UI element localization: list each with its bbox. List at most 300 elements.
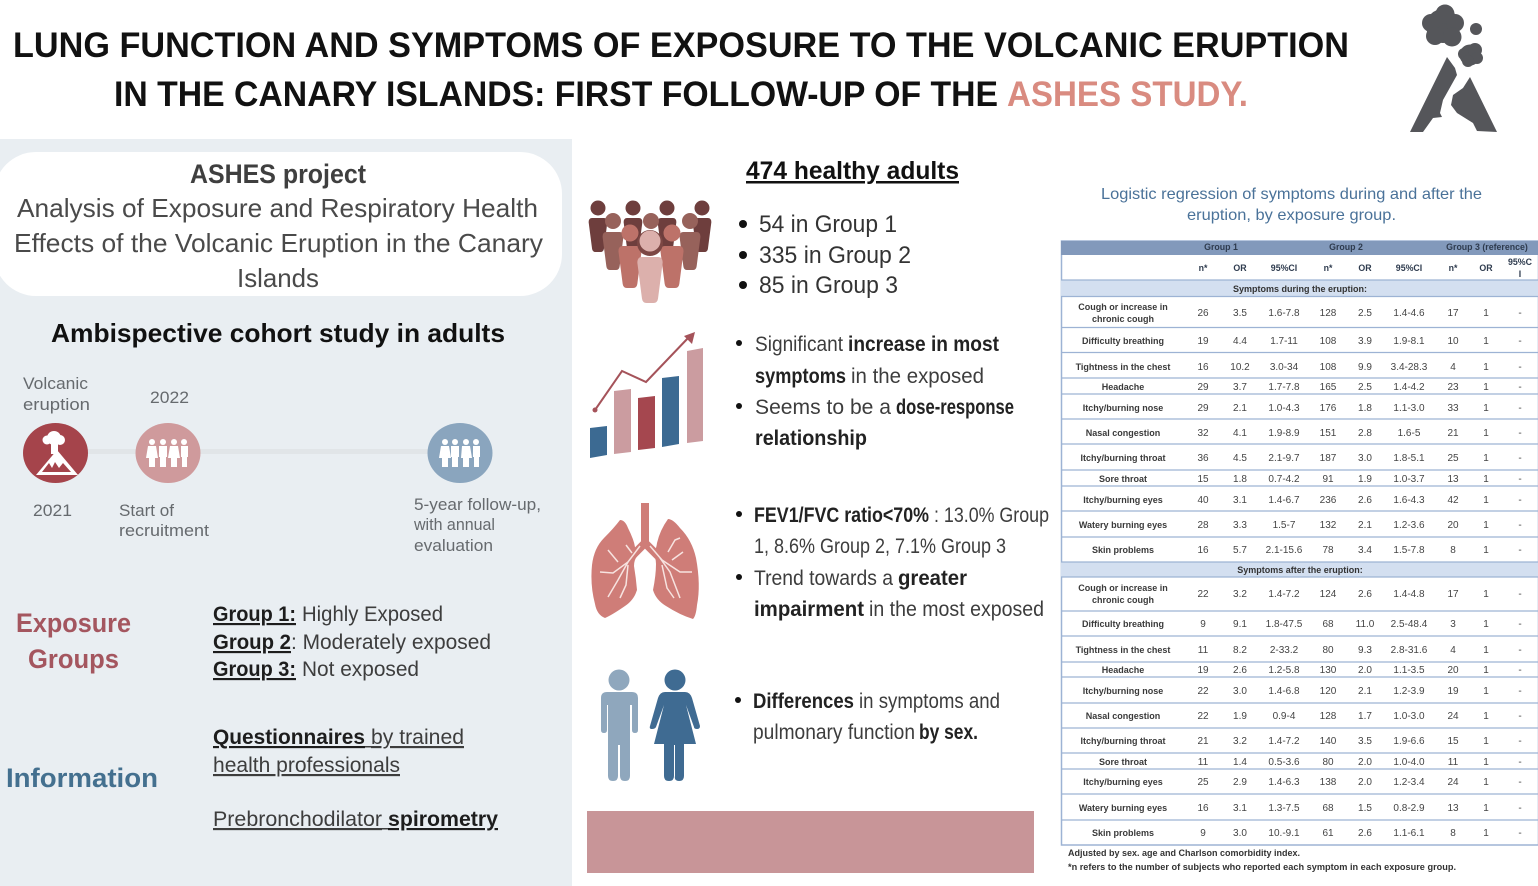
- text: pulmonary function findings: 1, 8.6% Group 2, 7.1% Group 3: [754, 535, 1006, 558]
- table section: symptoms during the eruption: 3.3: [1233, 520, 1247, 531]
- table section: symptoms after the eruption: 22: [1197, 686, 1209, 697]
- table section: symptoms after the eruption: 0.9-4: [1273, 711, 1296, 722]
- table section: symptoms after the eruption: Itchy/burning eyes: [1083, 777, 1163, 787]
- table section: symptoms after the eruption: 3.5: [1358, 736, 1372, 747]
- table section: symptoms during the eruption: 23: [1447, 382, 1459, 393]
- table section: symptoms during the eruption: [1076, 284, 1522, 556]
- table section: symptoms during the eruption: 1: [1483, 428, 1489, 439]
- text: information methods: Questionnaires: [213, 725, 365, 749]
- table section: symptoms during the eruption: 1.0-3.7: [1393, 474, 1425, 485]
- icon: recruitment milestone: [136, 423, 200, 483]
- table section: symptoms after the eruption: 2.0: [1358, 665, 1372, 676]
- text: pulmonary function findings: Trend towards a: [754, 567, 893, 590]
- table section: symptoms after the eruption: 16: [1197, 803, 1209, 814]
- table section: symptoms during the eruption: 3.9: [1358, 336, 1372, 347]
- table section: symptoms during the eruption: 29: [1197, 403, 1209, 414]
- table header: Group 3 (reference): [1446, 242, 1528, 252]
- timeline: [23, 374, 541, 555]
- table header: Group 1: [1204, 242, 1238, 252]
- text: information methods: [213, 725, 498, 831]
- table header: 95%C: [1508, 257, 1533, 267]
- table section: symptoms during the eruption: 1: [1483, 336, 1489, 347]
- table section: symptoms during the eruption: 4: [1450, 362, 1456, 373]
- table section: symptoms during the eruption: -: [1518, 453, 1522, 464]
- table section: symptoms during the eruption: 1.9-8.9: [1268, 428, 1300, 439]
- table section: symptoms after the eruption: 1: [1483, 828, 1489, 839]
- table section: symptoms after the eruption: 1: [1483, 803, 1489, 814]
- table section: symptoms during the eruption: -: [1518, 403, 1522, 414]
- table section: symptoms after the eruption: 1: [1483, 757, 1489, 768]
- table section: symptoms during the eruption: chronic cough: [1092, 314, 1154, 324]
- table section: symptoms after the eruption: -: [1518, 803, 1522, 814]
- text: table footnotes: [1068, 848, 1456, 873]
- table section: symptoms during the eruption: -: [1518, 545, 1522, 556]
- table section: symptoms during the eruption: 176: [1320, 403, 1337, 414]
- table section: symptoms during the eruption: 3.0-34: [1270, 362, 1299, 373]
- panel: pink banner: [587, 811, 1034, 873]
- table section: symptoms during the eruption: 2.5: [1358, 382, 1372, 393]
- table section: symptoms during the eruption: 78: [1322, 545, 1334, 556]
- table section: symptoms after the eruption: Headache: [1102, 665, 1144, 675]
- table section: symptoms after the eruption: 1.4-7.2: [1268, 736, 1300, 747]
- table section: symptoms during the eruption: 13: [1447, 474, 1459, 485]
- table section: symptoms after the eruption: 61: [1322, 828, 1334, 839]
- table section: symptoms after the eruption: 1.2-5.8: [1268, 665, 1300, 676]
- table section: symptoms after the eruption: 3: [1450, 619, 1456, 630]
- table section: symptoms during the eruption: 4.4: [1233, 336, 1247, 347]
- table section: symptoms during the eruption: Difficulty breathing: [1082, 336, 1164, 346]
- table section: symptoms during the eruption: 2.1: [1233, 403, 1247, 414]
- table section: symptoms after the eruption: 2.5-48.4: [1391, 619, 1428, 630]
- table section: symptoms during the eruption: Nasal congestion: [1086, 428, 1160, 438]
- timeline labels: 2021: [33, 501, 72, 520]
- table section: symptoms after the eruption: 1: [1483, 619, 1489, 630]
- text: sex differences: pulmonary function: [753, 721, 915, 744]
- heading: table title: eruption, by exposure group.: [1187, 207, 1396, 224]
- table section: symptoms during the eruption: 187: [1320, 453, 1337, 464]
- table section: symptoms after the eruption: [1076, 565, 1522, 839]
- text: project name: [14, 193, 543, 293]
- table section: symptoms during the eruption: Sore throat: [1099, 474, 1147, 484]
- table section: symptoms during the eruption: -: [1518, 428, 1522, 439]
- table section: symptoms during the eruption: 3.4: [1358, 545, 1372, 556]
- text: group sizes: [739, 211, 911, 299]
- table section: symptoms after the eruption: 1.8-47.5: [1266, 619, 1303, 630]
- timeline labels: 2022: [150, 388, 189, 407]
- table section: symptoms after the eruption: Itchy/burning nose: [1083, 686, 1163, 696]
- text: group definitions: [213, 602, 491, 681]
- table section: symptoms after the eruption: 13: [1447, 803, 1459, 814]
- table section: symptoms after the eruption: 2.1: [1358, 686, 1372, 697]
- table section: symptoms after the eruption: 11: [1198, 757, 1209, 768]
- table section: symptoms during the eruption: 36: [1197, 453, 1209, 464]
- table section: symptoms after the eruption: 21: [1197, 736, 1209, 747]
- text: pulmonary function findings: [736, 504, 1049, 621]
- table section: symptoms after the eruption: 1: [1483, 711, 1489, 722]
- panel: ASHES project box: [0, 152, 562, 296]
- table section: symptoms during the eruption: 1.2-3.6: [1393, 520, 1425, 531]
- table section: symptoms after the eruption: 120: [1320, 686, 1337, 697]
- table section: symptoms after the eruption: 10.-9.1: [1268, 828, 1300, 839]
- table section: symptoms during the eruption: 1: [1483, 403, 1489, 414]
- icon: bar chart with rising arrow: [590, 332, 703, 458]
- table section: symptoms after the eruption: 2-33.2: [1270, 645, 1299, 656]
- table header: 95%CI: [1396, 263, 1422, 273]
- table section: symptoms during the eruption: 25: [1447, 453, 1459, 464]
- table section: symptoms during the eruption: 19: [1197, 336, 1209, 347]
- table section: symptoms during the eruption: 132: [1320, 520, 1337, 531]
- table section: symptoms during the eruption: 1: [1483, 474, 1489, 485]
- table section: symptoms during the eruption: 3.4-28.3: [1391, 362, 1428, 373]
- table section: symptoms during the eruption: 16: [1197, 362, 1209, 373]
- table section: symptoms during the eruption: Symptoms during the eruption:: [1233, 284, 1367, 294]
- table section: symptoms after the eruption: -: [1518, 828, 1522, 839]
- table: logistic regression: [1061, 241, 1538, 845]
- table header: I: [1519, 269, 1521, 279]
- heading: exposure groups: [16, 608, 131, 674]
- table section: symptoms after the eruption: 130: [1320, 665, 1337, 676]
- table section: symptoms during the eruption: 236: [1320, 495, 1337, 506]
- timeline labels: eruption: [23, 395, 90, 414]
- table section: symptoms during the eruption: 29: [1197, 382, 1209, 393]
- table section: symptoms during the eruption: 3.7: [1233, 382, 1247, 393]
- table section: symptoms during the eruption: 1: [1483, 362, 1489, 373]
- text: sex differences: in symptoms and: [859, 690, 1000, 713]
- table section: symptoms after the eruption: 8.2: [1233, 645, 1247, 656]
- text: project name: Islands: [237, 263, 319, 293]
- text: sex differences: [735, 690, 1000, 744]
- timeline labels: evaluation: [414, 536, 493, 555]
- text: symptom findings: in the exposed: [851, 365, 984, 388]
- table section: symptoms after the eruption: Skin problems: [1092, 828, 1154, 838]
- table section: symptoms during the eruption: 165: [1320, 382, 1337, 393]
- icon: woman: [650, 670, 700, 781]
- table section: symptoms after the eruption: 1.9: [1233, 711, 1247, 722]
- table header: OR: [1479, 263, 1493, 273]
- table section: symptoms during the eruption: 1.5-7: [1273, 520, 1296, 531]
- table section: symptoms during the eruption: Headache: [1102, 382, 1144, 392]
- table section: symptoms after the eruption: 1.4-6.8: [1268, 686, 1300, 697]
- table section: symptoms during the eruption: 1.8-5.1: [1393, 453, 1425, 464]
- table section: symptoms after the eruption: 11: [1448, 757, 1459, 768]
- table section: symptoms during the eruption: 2.6: [1358, 495, 1372, 506]
- table section: symptoms during the eruption: Watery burning eyes: [1079, 520, 1167, 530]
- text: information methods: spirometry: [388, 807, 498, 831]
- table section: symptoms during the eruption: 5.7: [1233, 545, 1247, 556]
- table section: symptoms during the eruption: Cough or increase in: [1078, 302, 1168, 312]
- table section: symptoms during the eruption: 10: [1447, 336, 1459, 347]
- table section: symptoms during the eruption: Itchy/burning eyes: [1083, 495, 1163, 505]
- table section: symptoms during the eruption: 15: [1197, 474, 1209, 485]
- table section: symptoms during the eruption: 0.7-4.2: [1268, 474, 1300, 485]
- table section: symptoms after the eruption: 3.0: [1233, 828, 1247, 839]
- text: pulmonary function findings: greater: [898, 567, 967, 590]
- table section: symptoms during the eruption: -: [1518, 362, 1522, 373]
- table section: symptoms during the eruption: 1: [1483, 495, 1489, 506]
- table section: symptoms during the eruption: 4.1: [1233, 428, 1247, 439]
- table section: symptoms after the eruption: -: [1518, 589, 1522, 600]
- table section: symptoms after the eruption: 2.6: [1358, 828, 1372, 839]
- table section: symptoms during the eruption: 1.8: [1358, 403, 1372, 414]
- table section: symptoms after the eruption: 8: [1450, 828, 1456, 839]
- table section: symptoms during the eruption: 1.6-5: [1398, 428, 1421, 439]
- text: group definitions: Highly Exposed: [302, 602, 443, 626]
- table section: symptoms after the eruption: Symptoms after the eruption:: [1237, 565, 1363, 575]
- heading: 474 healthy adults: 474 healthy adults: [746, 157, 959, 185]
- table section: symptoms after the eruption: Watery burning eyes: [1079, 803, 1167, 813]
- table header: n*: [1324, 263, 1333, 273]
- table section: symptoms after the eruption: 1.0-3.0: [1393, 711, 1425, 722]
- heading: table title: Logistic regression of symptoms during and after the: [1101, 186, 1482, 203]
- icon: volcano milestone: [23, 423, 88, 483]
- table section: symptoms after the eruption: 11: [1198, 645, 1209, 656]
- table section: symptoms after the eruption: 3.2: [1233, 736, 1247, 747]
- table section: symptoms during the eruption: 4.5: [1233, 453, 1247, 464]
- table section: symptoms during the eruption: 1.4-4.6: [1393, 308, 1425, 319]
- table section: symptoms after the eruption: -: [1518, 665, 1522, 676]
- table section: symptoms during the eruption: 1.8: [1233, 474, 1247, 485]
- text: group sizes: 85 in Group 3: [759, 272, 898, 299]
- text: pulmonary function findings: impairment: [754, 598, 864, 621]
- table section: symptoms after the eruption: -: [1518, 736, 1522, 747]
- table header: n*: [1449, 263, 1458, 273]
- table section: symptoms after the eruption: 1.4-7.2: [1268, 589, 1300, 600]
- table section: symptoms during the eruption: 1.7-7.8: [1268, 382, 1300, 393]
- table section: symptoms after the eruption: -: [1518, 686, 1522, 697]
- table section: symptoms after the eruption: 3.2: [1233, 589, 1247, 600]
- text: symptom findings: Significant: [755, 333, 843, 356]
- table section: symptoms during the eruption: 20: [1447, 520, 1459, 531]
- text: group sizes: 54 in Group 1: [759, 211, 897, 238]
- heading: information: Information: [6, 763, 158, 793]
- text: symptom findings: dose-response: [896, 396, 1014, 419]
- table section: symptoms after the eruption: -: [1518, 777, 1522, 788]
- table section: symptoms after the eruption: 140: [1320, 736, 1337, 747]
- table section: symptoms after the eruption: 17: [1447, 589, 1459, 600]
- table section: symptoms during the eruption: 1: [1483, 545, 1489, 556]
- table section: symptoms during the eruption: 128: [1320, 308, 1337, 319]
- table section: symptoms during the eruption: 32: [1197, 428, 1209, 439]
- table section: symptoms during the eruption: 2.1-9.7: [1268, 453, 1300, 464]
- table section: symptoms after the eruption: 22: [1197, 589, 1209, 600]
- table section: symptoms after the eruption: 1: [1483, 686, 1489, 697]
- table section: symptoms after the eruption: Sore throat: [1099, 757, 1147, 767]
- table section: symptoms during the eruption: 1.5-7.8: [1393, 545, 1425, 556]
- table section: symptoms during the eruption: 1.9-8.1: [1393, 336, 1425, 347]
- table section: symptoms after the eruption: 4: [1450, 645, 1456, 656]
- table section: symptoms after the eruption: 80: [1322, 645, 1334, 656]
- table section: symptoms after the eruption: 20: [1447, 665, 1459, 676]
- text: pulmonary function findings: : 13.0% Group: [934, 504, 1049, 527]
- table section: symptoms during the eruption: 1.9: [1358, 474, 1372, 485]
- title: [13, 26, 1349, 114]
- text: group sizes: 335 in Group 2: [759, 242, 911, 269]
- heading: study design: Ambispective cohort study in adults: [51, 318, 505, 348]
- icon: lungs: [591, 503, 699, 619]
- table section: symptoms after the eruption: 15: [1447, 736, 1459, 747]
- table section: symptoms after the eruption: 128: [1320, 711, 1337, 722]
- icon: man and woman: [601, 670, 700, 781]
- text: symptom findings: [736, 333, 1014, 450]
- table section: symptoms after the eruption: Difficulty breathing: [1082, 619, 1164, 629]
- title: LUNG FUNCTION AND SYMPTOMS OF EXPOSURE TO THE VOLCANIC ERUPTION: [13, 26, 1349, 65]
- table section: symptoms after the eruption: 25: [1197, 777, 1209, 788]
- table section: symptoms during the eruption: 21: [1447, 428, 1459, 439]
- table section: symptoms during the eruption: 2.1-15.6: [1266, 545, 1303, 556]
- table section: symptoms during the eruption: 26: [1197, 308, 1209, 319]
- text: table footnotes: Adjusted by sex. age and Charlson comorbidity index.: [1068, 848, 1300, 859]
- table section: symptoms after the eruption: 2.6: [1233, 665, 1247, 676]
- heading: exposure groups: Groups: [28, 644, 119, 674]
- table section: symptoms during the eruption: Skin problems: [1092, 545, 1154, 555]
- text: symptom findings: relationship: [755, 427, 867, 450]
- table section: symptoms after the eruption: 2.9: [1233, 777, 1247, 788]
- table section: symptoms after the eruption: 1.7: [1358, 711, 1372, 722]
- timeline labels: Start of: [119, 501, 174, 520]
- table header: OR: [1358, 263, 1372, 273]
- table section: symptoms after the eruption: 1.0-4.0: [1393, 757, 1425, 768]
- table section: symptoms during the eruption: 1.1-3.0: [1393, 403, 1425, 414]
- table header: OR: [1233, 263, 1247, 273]
- text: symptom findings: Seems to be a: [755, 396, 891, 419]
- table section: symptoms after the eruption: -: [1518, 757, 1522, 768]
- table header: 95%CI: [1271, 263, 1297, 273]
- table section: symptoms during the eruption: 2.1: [1358, 520, 1372, 531]
- table section: symptoms during the eruption: 17: [1447, 308, 1459, 319]
- heading: exposure groups: Exposure: [16, 608, 131, 638]
- icon: crowd of people: [589, 200, 711, 303]
- text: sex differences: Differences: [753, 690, 854, 713]
- heading: ASHES project: ASHES project: [190, 159, 366, 189]
- table section: symptoms during the eruption: 1: [1483, 382, 1489, 393]
- table section: symptoms after the eruption: 1: [1483, 589, 1489, 600]
- table section: symptoms after the eruption: 1.3-7.5: [1268, 803, 1300, 814]
- panel: left background: [0, 139, 572, 886]
- table section: symptoms after the eruption: 1: [1483, 736, 1489, 747]
- table section: symptoms during the eruption: Itchy/burning nose: [1083, 403, 1163, 413]
- text: pulmonary function findings: in the most exposed: [869, 598, 1044, 621]
- table section: symptoms during the eruption: 1: [1483, 453, 1489, 464]
- table section: symptoms during the eruption: -: [1518, 495, 1522, 506]
- table section: symptoms after the eruption: -: [1518, 619, 1522, 630]
- table section: symptoms during the eruption: 2.8: [1358, 428, 1372, 439]
- table section: symptoms after the eruption: 19: [1197, 665, 1209, 676]
- table section: symptoms during the eruption: 1.0-4.3: [1268, 403, 1300, 414]
- table section: symptoms during the eruption: 1.6-7.8: [1268, 308, 1300, 319]
- table section: symptoms after the eruption: 19: [1447, 686, 1459, 697]
- table section: symptoms after the eruption: 1: [1483, 665, 1489, 676]
- table header: Group 2: [1329, 242, 1363, 252]
- title: IN THE CANARY ISLANDS: FIRST FOLLOW-UP OF THE: [114, 75, 998, 114]
- table section: symptoms after the eruption: 24: [1447, 711, 1459, 722]
- table section: symptoms after the eruption: 22: [1197, 711, 1209, 722]
- timeline labels: with annual: [413, 515, 495, 534]
- table section: symptoms after the eruption: 1.1-6.1: [1393, 828, 1425, 839]
- table section: symptoms during the eruption: 9.9: [1358, 362, 1372, 373]
- table section: symptoms during the eruption: 42: [1447, 495, 1459, 506]
- table section: symptoms after the eruption: -: [1518, 645, 1522, 656]
- table section: symptoms after the eruption: 1.4: [1233, 757, 1247, 768]
- table section: symptoms during the eruption: 3.0: [1358, 453, 1372, 464]
- table section: symptoms after the eruption: 1.9-6.6: [1393, 736, 1425, 747]
- table header: n*: [1199, 263, 1208, 273]
- table section: symptoms during the eruption: -: [1518, 336, 1522, 347]
- table section: symptoms during the eruption: -: [1518, 382, 1522, 393]
- table section: symptoms during the eruption: 1.4-4.2: [1393, 382, 1425, 393]
- table section: symptoms after the eruption: 2.0: [1358, 777, 1372, 788]
- table section: symptoms after the eruption: 2.6: [1358, 589, 1372, 600]
- table section: symptoms after the eruption: 1.4-6.3: [1268, 777, 1300, 788]
- timeline labels: recruitment: [119, 521, 209, 540]
- table section: symptoms after the eruption: 1.2-3.9: [1393, 686, 1425, 697]
- table header: [1199, 242, 1533, 279]
- text: information methods: Prebronchodilator: [213, 807, 382, 831]
- heading: table title: [1101, 186, 1482, 224]
- table section: symptoms after the eruption: 2.0: [1358, 757, 1372, 768]
- table section: symptoms during the eruption: 1.6-4.3: [1393, 495, 1425, 506]
- table section: symptoms during the eruption: 108: [1320, 336, 1337, 347]
- table section: symptoms after the eruption: 11.0: [1356, 619, 1375, 630]
- table section: symptoms during the eruption: 91: [1322, 474, 1334, 485]
- table section: symptoms during the eruption: Itchy/burning throat: [1080, 453, 1166, 463]
- table section: symptoms after the eruption: 68: [1322, 803, 1334, 814]
- table section: symptoms during the eruption: 1: [1483, 520, 1489, 531]
- table section: symptoms after the eruption: 2.8-31.6: [1391, 645, 1428, 656]
- table section: symptoms during the eruption: -: [1518, 308, 1522, 319]
- icon: man: [601, 670, 638, 781]
- text: project name: Analysis of Exposure and Respiratory Health: [17, 193, 538, 223]
- table section: symptoms after the eruption: 138: [1320, 777, 1337, 788]
- text: group definitions: Group 2: [213, 630, 291, 654]
- table section: symptoms after the eruption: Cough or increase in: [1078, 583, 1168, 593]
- table section: symptoms after the eruption: 80: [1322, 757, 1334, 768]
- text: group definitions: Group 1:: [213, 602, 296, 626]
- timeline labels: [23, 374, 541, 555]
- table section: symptoms after the eruption: Tightness in the chest: [1076, 645, 1170, 655]
- table section: symptoms after the eruption: Itchy/burning throat: [1080, 736, 1166, 746]
- table section: symptoms after the eruption: Nasal congestion: [1086, 711, 1160, 721]
- table section: symptoms during the eruption: Tightness in the chest: [1076, 362, 1170, 372]
- table section: symptoms after the eruption: chronic cough: [1092, 595, 1154, 605]
- text: information methods: by trained: [371, 725, 464, 749]
- table section: symptoms during the eruption: 8: [1450, 545, 1456, 556]
- table section: symptoms during the eruption: -: [1518, 520, 1522, 531]
- table section: symptoms after the eruption: 3.0: [1233, 686, 1247, 697]
- table section: symptoms after the eruption: 1.2-3.4: [1393, 777, 1425, 788]
- table section: symptoms after the eruption: 0.8-2.9: [1393, 803, 1425, 814]
- table section: symptoms after the eruption: 3.1: [1233, 803, 1247, 814]
- timeline labels: Volcanic: [23, 374, 89, 393]
- text: sex differences: by sex.: [919, 721, 978, 744]
- table section: symptoms during the eruption: 151: [1320, 428, 1337, 439]
- table section: symptoms during the eruption: 3.1: [1233, 495, 1247, 506]
- table section: symptoms after the eruption: 24: [1447, 777, 1459, 788]
- table section: symptoms after the eruption: 1: [1483, 777, 1489, 788]
- table section: symptoms during the eruption: 3.5: [1233, 308, 1247, 319]
- text: pulmonary function findings: FEV1/FVC ratio<70%: [754, 504, 929, 527]
- table section: symptoms during the eruption: 1.4-6.7: [1268, 495, 1300, 506]
- table section: symptoms after the eruption: 9.3: [1358, 645, 1372, 656]
- text: group definitions: : Moderately exposed: [291, 630, 491, 654]
- table section: symptoms during the eruption: -: [1518, 474, 1522, 485]
- table section: symptoms during the eruption: 1.7-11: [1270, 336, 1298, 347]
- table section: symptoms after the eruption: 9: [1200, 828, 1206, 839]
- text: symptom findings: increase in most: [848, 333, 999, 356]
- table section: symptoms after the eruption: 9.1: [1233, 619, 1247, 630]
- table section: symptoms after the eruption: 124: [1320, 589, 1337, 600]
- table section: symptoms after the eruption: 9: [1200, 619, 1206, 630]
- text: table footnotes: *n refers to the number of subjects who reported each symptom in each exposure group.: [1068, 862, 1456, 873]
